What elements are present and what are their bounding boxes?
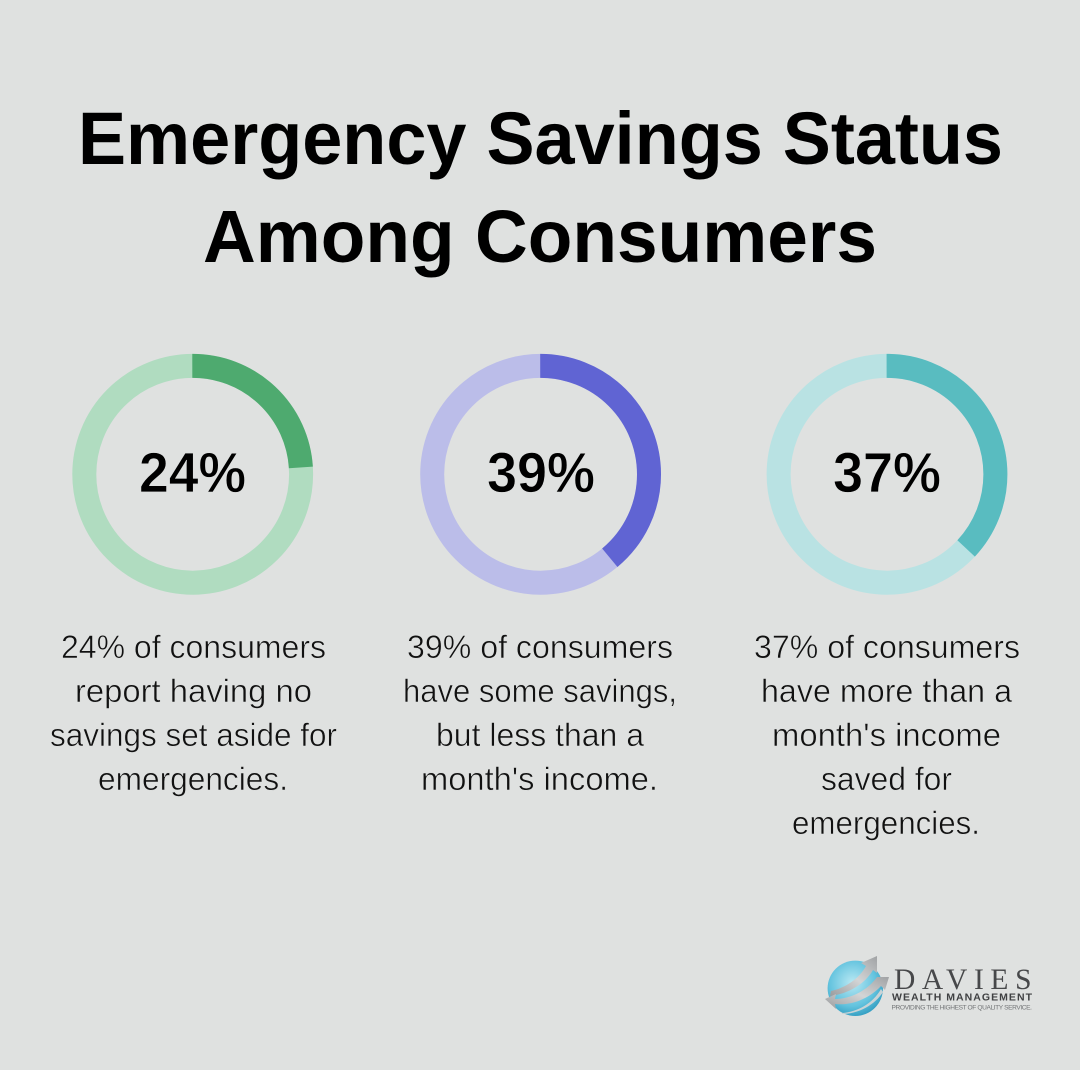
text: 37% description: 37% of consumers [754,629,1020,665]
text: 37% description: saved for [821,761,952,797]
donut chart: 37% [779,366,995,583]
logo: Davies Wealth Management [825,956,1033,1016]
donut chart: 24% [84,366,301,583]
panel: more than a month [754,366,1020,841]
text: 24% description: emergencies. [98,761,288,797]
text: 24% description: 24% of consumers [61,629,326,665]
icon: globe with arrows [825,956,889,1016]
donut chart: 37%: 37% [833,441,941,505]
donut chart: 39% [432,366,649,583]
panel: some savings [403,366,677,797]
text: 39% description: but less than a [436,717,644,753]
text: 37% description [754,629,1020,841]
title [78,97,1003,278]
donut chart: 39%: 39% [487,441,595,505]
text: 24% description: report having no [75,673,312,709]
text: 37% description: emergencies. [792,805,980,841]
panel: no savings [50,366,337,797]
title: Emergency Savings Status [78,97,1003,180]
text: 39% description: month's income. [421,761,658,797]
text: 39% description: 39% of consumers [407,629,673,665]
text: 24% description [50,629,337,797]
text: 39% description [403,629,677,797]
text: 24% description: savings set aside for [50,717,337,753]
donut chart: 24%: 24% [139,441,246,505]
logo wordmark: DAVIES [894,964,1032,996]
text: 37% description: have more than a [761,673,1012,709]
logo subtitle: WEALTH MANAGEMENT [892,992,1033,1004]
text: 39% description: have some savings, [403,673,677,709]
title: Among Consumers [203,195,877,278]
logo tagline: PROVIDING THE HIGHEST OF QUALITY SERVICE. [892,1005,1032,1012]
text: 37% description: month's income [772,717,1001,753]
